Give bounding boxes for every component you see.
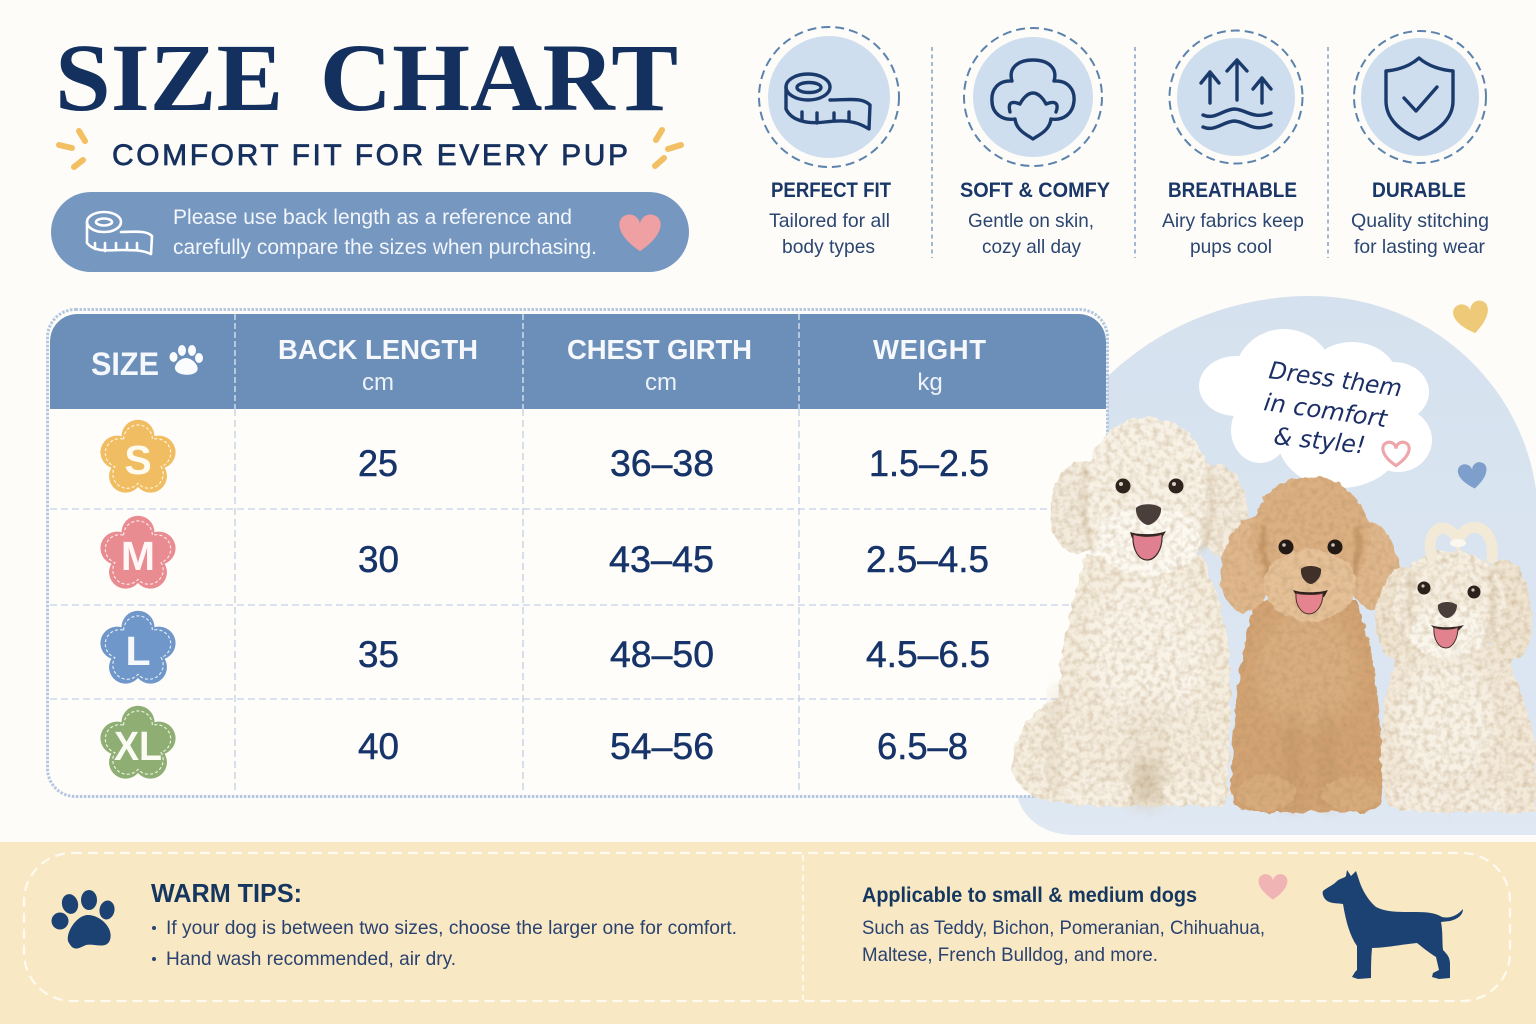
title: SIZE CHART [55, 24, 678, 131]
feature text: Quality stitching [1351, 210, 1489, 232]
cloud text: & style! [1272, 422, 1367, 460]
badge M: M [121, 533, 155, 579]
badge S [100, 420, 176, 493]
row XL: 40 [358, 726, 399, 767]
icon: cotton [992, 60, 1074, 139]
feature text: cozy all day [982, 236, 1081, 258]
feature text [1162, 179, 1304, 258]
row S: 1.5–2.5 [869, 443, 989, 484]
header: back length [278, 334, 478, 396]
note text: carefully compare the sizes when purchasing. [173, 235, 597, 259]
icon: pink heart [619, 215, 661, 251]
warm tips band [0, 842, 1536, 1024]
note text: Please use back length as a reference and [173, 205, 572, 229]
subtitle text: COMFORT FIT FOR EVERY PUP [112, 139, 628, 172]
feature text: BREATHABLE [1168, 179, 1297, 202]
header: size [91, 345, 203, 382]
subtitle with sparkles [59, 130, 681, 172]
feature: soft and comfy [960, 28, 1110, 258]
dog: white bichon [1012, 417, 1253, 806]
feature text: DURABLE [1372, 179, 1466, 202]
header: back length: cm [362, 369, 394, 396]
badge L [100, 611, 176, 684]
feature text: pups cool [1190, 236, 1272, 258]
size table [48, 310, 1108, 796]
badge XL [100, 706, 176, 779]
cloud text: Dress them [1267, 356, 1404, 403]
cloud text: in comfort [1262, 388, 1390, 433]
row M: 30 [358, 539, 399, 580]
feature text: SOFT & COMFY [960, 179, 1110, 202]
face [1116, 478, 1184, 560]
face [1278, 540, 1342, 614]
row L [100, 611, 990, 684]
header: size: SIZE [91, 346, 159, 382]
feature text: Gentle on skin, [968, 210, 1094, 232]
applicable dogs text: Maltese, French Bulldog, and more. [862, 944, 1158, 966]
feature text: Tailored for all [769, 210, 890, 232]
feature text: body types [782, 236, 875, 258]
row XL: 54–56 [610, 726, 714, 767]
row XL [100, 706, 968, 779]
warm tips text: Hand wash recommended, air dry. [166, 948, 456, 970]
feature text [960, 179, 1110, 258]
icon: blue heart [1457, 461, 1489, 491]
header: weight: WEIGHT [873, 334, 986, 365]
icon: pink heart small [1259, 874, 1287, 900]
applicable dogs text [862, 884, 1265, 966]
icon: tape measure white [87, 212, 152, 254]
row M: 2.5–4.5 [866, 539, 989, 580]
icon: navy paw [52, 890, 116, 949]
row S [100, 420, 989, 493]
icon: outline heart [1383, 442, 1409, 466]
warm tips text: WARM TIPS: [151, 878, 302, 908]
row M: 43–45 [609, 539, 714, 580]
speech cloud [1199, 329, 1432, 488]
top knot [1430, 527, 1492, 558]
icon: yellow heart [1452, 299, 1492, 337]
header: weight: kg [917, 369, 943, 396]
badge M [100, 516, 176, 589]
feature text: Airy fabrics keep [1162, 210, 1304, 232]
icon: white paw [170, 345, 203, 375]
sparkle left [59, 131, 85, 167]
applicable dogs text: Such as Teddy, Bichon, Pomeranian, Chihuahua, [862, 917, 1265, 939]
icon: arrows and waves [1201, 60, 1271, 128]
badge XL: XL [114, 723, 162, 769]
dog: tan poodle [1214, 476, 1407, 812]
row M [100, 516, 989, 589]
applicable dogs text: Applicable to small & medium dogs [862, 884, 1197, 907]
feature: durable [1351, 31, 1489, 258]
badge L: L [125, 628, 151, 674]
panel: dog backdrop [1015, 296, 1536, 835]
feature: breathable [1162, 30, 1304, 258]
face [1418, 582, 1480, 648]
header: chest girth: cm [645, 369, 677, 396]
feature text [1351, 179, 1489, 258]
row L: 48–50 [610, 634, 714, 675]
row L: 35 [358, 634, 399, 675]
header: back length: BACK LENGTH [278, 334, 478, 365]
header: weight [873, 334, 986, 396]
row XL: 6.5–8 [877, 726, 968, 767]
note pill [51, 192, 689, 272]
note text [173, 205, 597, 259]
badge S: S [124, 437, 152, 483]
icon: dog silhouette [1323, 870, 1463, 979]
icon: tape measure [786, 74, 870, 129]
table header [50, 314, 1106, 409]
row S: 36–38 [610, 443, 714, 484]
feature text [769, 179, 891, 258]
header: chest girth [567, 334, 752, 396]
sparkle right [655, 130, 681, 166]
feature text: PERFECT FIT [771, 179, 891, 202]
cloud text [1262, 356, 1404, 460]
row S: 25 [358, 443, 398, 484]
icon: shield [1386, 58, 1453, 139]
feature: perfect fit [759, 27, 899, 258]
warm tips text: If your dog is between two sizes, choose the larger one for comfort. [166, 917, 737, 939]
header: chest girth: CHEST GIRTH [567, 334, 752, 365]
feature text: for lasting wear [1354, 236, 1485, 258]
dog: cream maltese [1371, 527, 1536, 813]
row L: 4.5–6.5 [866, 634, 990, 675]
warm tips text [151, 878, 737, 970]
